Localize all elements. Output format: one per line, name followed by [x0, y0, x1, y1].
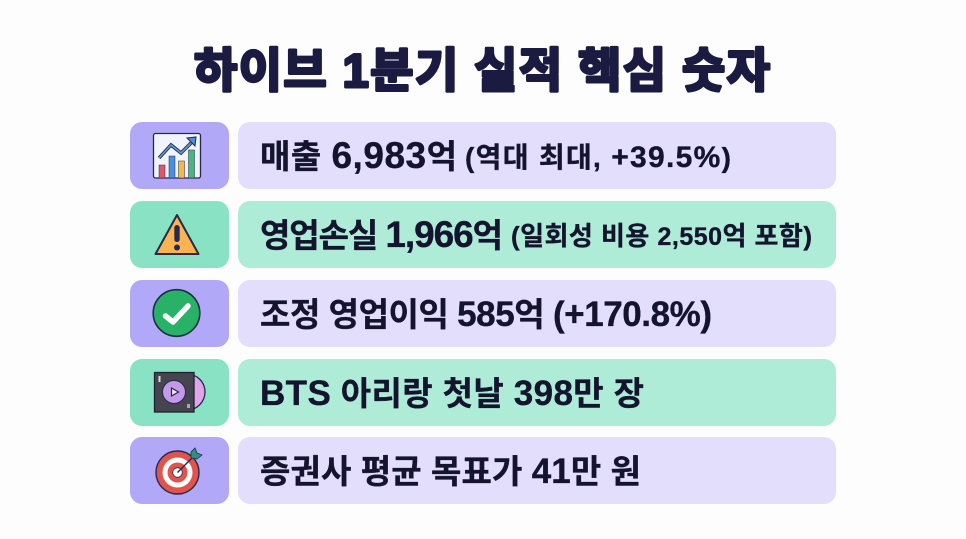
icon tile: album: [130, 359, 229, 426]
text bar: revenue: [238, 122, 836, 189]
title: 하이브 1분기 실적 핵심 숫자: [194, 44, 770, 97]
text bar: BTS album: BTS 아리랑 첫날 398만 장: [260, 374, 644, 413]
icon tile: revenue chart: [130, 122, 229, 189]
text bar: BTS album: [238, 359, 836, 426]
text bar: revenue: 매출 6,983억: [260, 135, 457, 176]
row 3: adjusted operating profit: [130, 280, 836, 347]
row 2: operating loss: [130, 201, 836, 268]
text bar: target price: 증권사 평균 목표가 41만 원: [260, 452, 641, 491]
icon tile: warning triangle: [130, 201, 229, 268]
row 5: target price: [130, 437, 836, 504]
text bar: operating loss: (일회성 비용 2,550억 포함): [511, 221, 812, 251]
text bar: adjusted operating profit: 조정 영업이익 585억 (+170.8%): [260, 295, 712, 334]
text bar: target price: [238, 437, 836, 504]
row 1: revenue: [130, 122, 836, 189]
text bar: operating loss: 영업손실 1,966억: [260, 214, 503, 255]
text bar: adjusted operating profit: [238, 280, 836, 347]
icon tile: check circle: [130, 280, 229, 347]
row 4: BTS album: [130, 359, 836, 426]
text bar: revenue: (역대 최대, +39.5%): [465, 141, 731, 174]
icon tile: target: [130, 437, 229, 504]
text bar: operating loss: [238, 201, 836, 268]
